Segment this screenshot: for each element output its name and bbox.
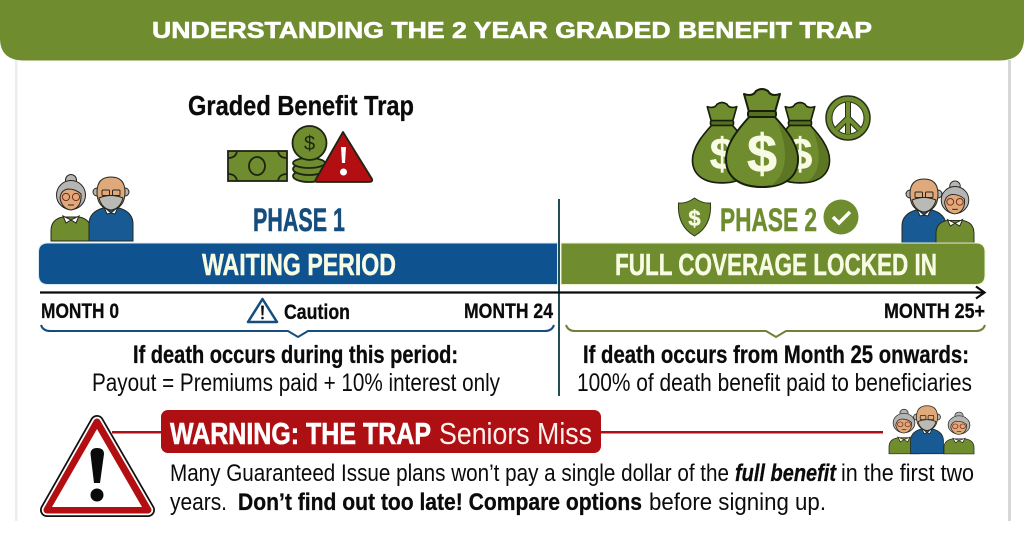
full coverage bar: [561, 243, 985, 284]
label: month 0: MONTH 0: [41, 300, 119, 323]
text: phase 1 outcome: [92, 341, 500, 397]
warning label: WARNING: THE TRAP: [170, 416, 431, 451]
icon: cash, coins and alert: [228, 126, 372, 182]
warning connector line: [112, 431, 883, 434]
icon: senior couple left: [51, 174, 133, 241]
warning body text: before signing up.: [649, 489, 826, 516]
label: month 24: MONTH 24: [464, 300, 553, 323]
text: phase 2 outcome: [577, 341, 972, 397]
warning body text: Many Guaranteed Issue plans won’t pay a single dollar of the: [170, 460, 729, 487]
warning label: [161, 410, 601, 453]
warning body text: [170, 460, 974, 516]
warning body text: full benefit: [735, 460, 837, 487]
icon: shield: $: [688, 206, 701, 231]
icon: cash, coins and alert: $: [304, 133, 315, 155]
caution label: Caution: [284, 301, 350, 324]
title banner: [0, 0, 1024, 60]
icon: senior couple right: [902, 179, 974, 243]
caution label: [248, 299, 350, 324]
warning body text: years.: [170, 489, 227, 516]
title banner: UNDERSTANDING THE 2 YEAR GRADED BENEFIT TRAP: [152, 17, 872, 43]
icon: money bags: $: [747, 124, 777, 184]
brace: phase 1: [41, 325, 554, 337]
phase divider: [558, 199, 560, 396]
warning body text: in the first two: [841, 460, 974, 487]
warning label: Seniors Miss: [439, 416, 592, 451]
phase 1 heading: PHASE 1: [253, 202, 345, 238]
warning body text: Don’t find out too late! Compare options: [238, 489, 642, 516]
icon: warning triangle: [47, 422, 148, 510]
icon: peace symbol: [826, 96, 870, 140]
phase 2 heading with icons: [678, 198, 858, 238]
icon: money bags: [692, 89, 830, 187]
icon: check badge: [824, 200, 858, 234]
icon: shield: [678, 198, 711, 236]
heading: graded benefit trap: Graded Benefit Trap: [188, 90, 414, 121]
timeline arrow: [40, 286, 984, 298]
icon: caution triangle: [248, 299, 277, 322]
waiting period bar: [38, 243, 558, 284]
icon: seniors trio: [889, 406, 974, 454]
text: phase 1 outcome: If death occurs during this period:: [133, 341, 458, 369]
icon: money bags: $: [710, 130, 734, 179]
label: month 25+: MONTH 25+: [884, 300, 985, 323]
phase 2 heading with icons: PHASE 2: [720, 202, 817, 238]
waiting period bar: WAITING PERIOD: [202, 247, 396, 282]
brace: phase 2: [566, 325, 985, 337]
text: phase 1 outcome: Payout = Premiums paid + 10% interest only: [92, 369, 500, 397]
icon: money bags: $: [788, 130, 812, 179]
